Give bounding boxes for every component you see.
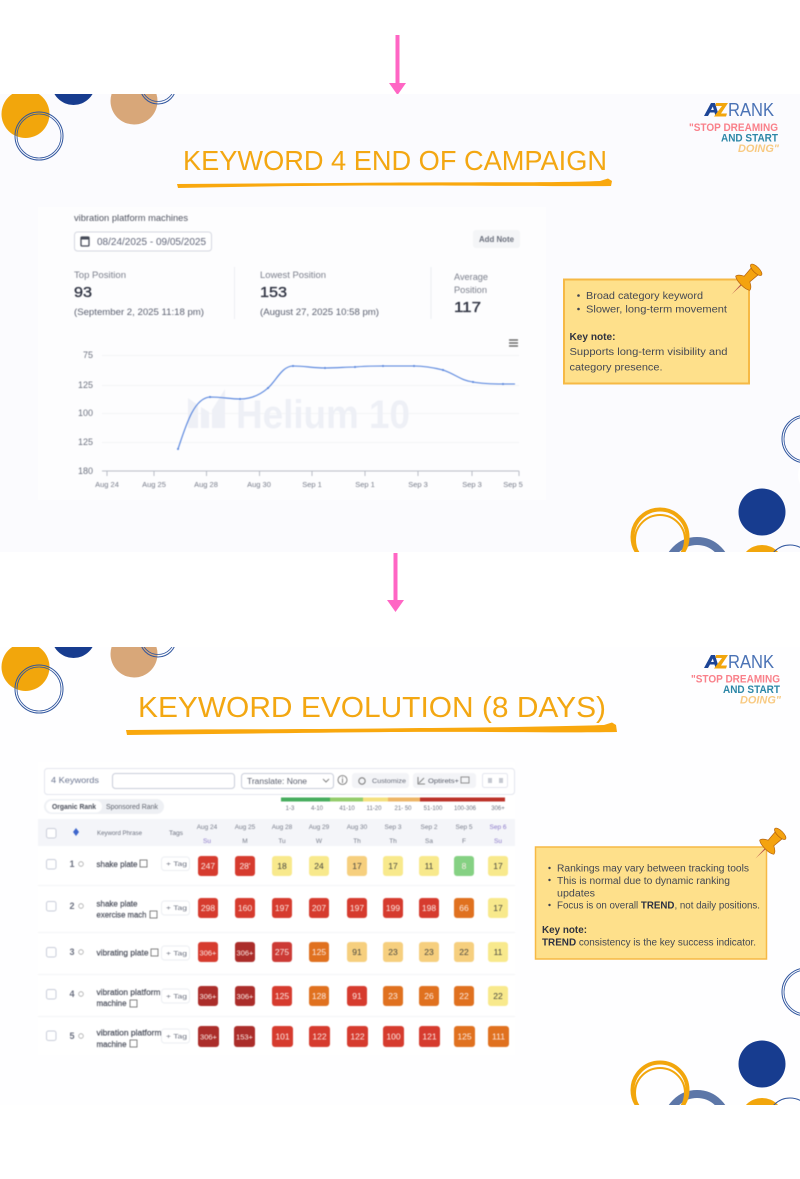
chart: keyword rank line: Aug 30 [247, 480, 271, 489]
table header: W [316, 838, 323, 845]
row: vibration platform machine second: 121 [422, 1032, 437, 1042]
table header: Tags [169, 830, 184, 837]
table header: Sep 6 [490, 824, 507, 831]
callout: broad category note: category presence. [570, 362, 662, 374]
row: vibrating plate: 23 [424, 947, 434, 957]
keyword name: vibration platform machines [74, 213, 188, 224]
logo: AZRANK: DOING" [738, 143, 780, 155]
title: KEYWORD EVOLUTION (8 DAYS) [138, 692, 606, 724]
chart: keyword rank line [78, 340, 523, 489]
tabs: organic and sponsored rank: Organic Rank [52, 804, 96, 811]
row: shake plate exercise mach: 197 [350, 903, 364, 913]
row: shake plate exercise mach: 298 [201, 903, 215, 913]
title underline [177, 178, 612, 188]
row: vibration platform machine second: + Tag [166, 1034, 188, 1040]
logo: AZRANK: AND START [721, 132, 778, 144]
legend: rank colour scale: 41-10 [339, 806, 355, 812]
row: vibration platform machine second: 125 [457, 1032, 472, 1042]
panel: keyword evolution [2, 647, 800, 1105]
row: shake plate: + Tag [166, 861, 188, 868]
table header: Keyword Phrase [97, 830, 142, 837]
row: vibration platform machine second: 122 [312, 1032, 327, 1042]
legend: rank colour scale [281, 798, 505, 812]
stat: top position: Top Position [74, 270, 126, 280]
stat: top position [74, 270, 204, 318]
row: shake plate [46, 856, 508, 876]
row: vibration platform machine: vibration platform [96, 988, 161, 997]
row: vibrating plate: + Tag [166, 950, 188, 958]
decoration: top left shapes [2, 94, 175, 160]
table header: Tu [278, 838, 286, 845]
legend: rank colour scale: 100-306 [454, 806, 477, 812]
row: vibration platform machine second [46, 1026, 509, 1049]
row: vibration platform machine: 26 [424, 991, 434, 1001]
table header: Th [353, 838, 361, 845]
add note button: Add Note [479, 235, 515, 244]
chart: keyword rank line: Aug 25 [142, 480, 166, 489]
logo: AZRANK: DOING" [740, 694, 782, 706]
row: shake plate exercise mach: shake plate [96, 900, 138, 908]
toolbar: Translate: None [247, 777, 308, 786]
legend: rank colour scale: 1-3 [286, 806, 295, 812]
row: shake plate exercise mach [46, 898, 508, 920]
row: vibrating plate: 22 [459, 947, 469, 957]
table header: Aug 24 [197, 824, 218, 831]
row: shake plate exercise mach: + Tag [166, 905, 188, 912]
watermark: Helium 10 [188, 389, 410, 437]
row: shake plate: 11 [425, 861, 434, 871]
row: vibrating plate: 23 [388, 947, 398, 957]
row: vibrating plate [46, 942, 508, 962]
row: shake plate exercise mach: exercise mach [96, 910, 146, 920]
table header: Aug 29 [309, 824, 330, 831]
row: vibration platform machine: 23 [388, 991, 398, 1001]
table header: Th [389, 838, 397, 845]
row: vibrating plate: 91 [352, 947, 362, 957]
icon: push pin [724, 261, 765, 302]
table header: Su [203, 838, 211, 845]
row: shake plate: 28' [239, 861, 251, 871]
title underline [126, 722, 617, 735]
decoration: top left shapes [2, 647, 175, 714]
legend: rank colour scale: 51-100 [424, 806, 443, 812]
row: vibration platform machine: 125 [275, 991, 289, 1001]
toolbar: 4 Keywords [51, 775, 99, 785]
arrow: top pink arrow [389, 35, 406, 95]
table header: Aug 30 [347, 824, 368, 831]
row: vibration platform machine second: 111 [492, 1032, 505, 1042]
callout: trend note: Focus is on overall TREND, not daily positions. [557, 900, 760, 912]
logo: AZRANK: "STOP DREAMING [689, 122, 778, 134]
stat: lowest position [260, 270, 379, 318]
logo: AZRANK [691, 652, 782, 706]
callout: broad category note: Broad category keyword [586, 291, 703, 302]
table header: Aug 28 [272, 824, 293, 831]
callout: trend note: TREND consistency is the key success indicator. [542, 938, 756, 948]
row: shake plate exercise mach: 2 [69, 901, 75, 911]
row: shake plate: 24 [314, 861, 324, 871]
tabs: organic and sponsored rank [44, 799, 164, 814]
row: vibration platform machine: 22 [459, 991, 469, 1001]
row: vibration platform machine second: 5 [69, 1031, 75, 1041]
stat: average position: 117 [454, 299, 481, 316]
row: shake plate: 17 [352, 861, 362, 871]
title: KEYWORD 4 END OF CAMPAIGN [183, 145, 607, 176]
callout: trend note: updates [557, 888, 595, 900]
chart: keyword rank line: Sep 3 [408, 480, 428, 489]
table header [38, 819, 515, 846]
stat: top position: (September 2, 2025 11:18 pm) [74, 307, 204, 318]
tabs: organic and sponsored rank: Sponsored Rank [106, 804, 158, 811]
row: shake plate: 17 [493, 861, 503, 871]
add note button [473, 230, 520, 248]
table header: Sa [425, 838, 433, 845]
row: vibration platform machine: 4 [69, 989, 75, 999]
logo: AZRANK: AND START [723, 684, 780, 696]
logo: AZRANK: RANK [728, 100, 774, 120]
toolbar [44, 768, 514, 794]
row: vibrating plate: 11 [494, 947, 503, 957]
date range picker: 08/24/2025 - 09/05/2025 [97, 237, 206, 248]
table header: Sep 2 [420, 824, 438, 831]
row: vibration platform machine: 306+ [200, 992, 217, 1001]
chart: keyword rank line: Sep 1 [302, 480, 322, 489]
callout: broad category note: Slower, long-term movement [586, 304, 727, 316]
table header: M [242, 838, 248, 845]
row: shake plate: 247 [201, 861, 215, 871]
row: vibration platform machine: 91 [352, 991, 362, 1001]
row: vibration platform machine [46, 986, 508, 1008]
stat: lowest position: 153 [260, 284, 287, 301]
row: vibration platform machine: + Tag [166, 994, 188, 1000]
row: shake plate exercise mach: 198 [422, 903, 436, 913]
icon: chart menu [509, 340, 518, 346]
table header: Aug 25 [235, 824, 256, 831]
callout: trend note: This is normal due to dynamic ranking [557, 876, 730, 887]
row: shake plate exercise mach: 17 [493, 903, 503, 913]
row: vibration platform machine: 22 [493, 991, 503, 1001]
chart: keyword rank line: 180 [78, 466, 93, 476]
arrow: middle pink arrow [387, 553, 404, 612]
legend: rank colour scale: 21- 50 [394, 806, 412, 812]
callout: trend note: Key note: [542, 925, 587, 936]
row: shake plate exercise mach: 66 [459, 903, 469, 913]
stat: average position: Position [454, 285, 487, 295]
callout: trend note [536, 847, 766, 959]
row: vibration platform machine: machine [96, 999, 127, 1008]
panel: keyword 4 end of campaign [2, 94, 800, 552]
chart: keyword rank line: 125 [78, 380, 93, 390]
row: vibrating plate: vibrating plate [96, 948, 149, 958]
callout: trend note: Rankings may vary between tracking tools [557, 864, 749, 874]
table header: Su [494, 838, 502, 845]
row: shake plate: 18 [277, 861, 287, 871]
row: vibrating plate: 125 [312, 947, 326, 957]
callout: broad category note [564, 280, 749, 384]
chart: keyword rank line: Aug 24 [95, 480, 119, 489]
legend: rank colour scale: 4-10 [311, 806, 324, 812]
chart: keyword rank line: 125 [78, 437, 93, 447]
table header: Sep 3 [384, 824, 402, 831]
row: vibration platform machine second: 122 [350, 1032, 365, 1042]
date range picker [74, 232, 212, 251]
row: vibration platform machine: 306+ [237, 992, 254, 1001]
row: vibration platform machine second: 153+ [236, 1032, 254, 1042]
stat: lowest position: Lowest Position [260, 270, 326, 280]
row: vibrating plate: 3 [69, 947, 75, 957]
row: shake plate: 1 [69, 859, 75, 869]
decoration: bottom right shapes [630, 415, 800, 552]
chart: keyword rank line: Sep 3 [462, 480, 482, 489]
row: vibration platform machine second: vibration platform [96, 1028, 162, 1038]
stat: lowest position: (August 27, 2025 10:58 pm) [260, 307, 379, 318]
chart: keyword rank line: 100 [78, 408, 93, 418]
row: shake plate exercise mach: 197 [275, 903, 289, 913]
row: shake plate exercise mach: 160 [238, 903, 252, 913]
panel: keyword table screenshot [38, 762, 515, 1055]
icon: push pin [748, 825, 789, 866]
row: vibration platform machine second: machine [96, 1040, 127, 1049]
logo: AZRANK: RANK [728, 652, 774, 672]
row: vibrating plate: 306+ [237, 948, 254, 958]
row: shake plate exercise mach: 199 [386, 903, 400, 913]
row: vibration platform machine second: 100 [386, 1032, 401, 1042]
logo: AZRANK [689, 100, 780, 155]
legend: rank colour scale: 11-20 [367, 806, 382, 812]
callout: broad category note: Supports long-term visibility and [570, 347, 728, 358]
chart: keyword rank line: Aug 28 [194, 480, 218, 489]
toolbar: Optirets+ [428, 778, 459, 785]
row: shake plate exercise mach: 207 [312, 903, 326, 913]
chart: keyword rank line: 75 [83, 350, 93, 360]
stat: average position: Average [454, 272, 488, 282]
table header: F [462, 838, 466, 845]
legend: rank colour scale: 306+ [491, 806, 505, 812]
decoration: bottom right shapes [630, 968, 800, 1105]
watermark: Helium 10: Helium 10 [236, 393, 410, 437]
row: shake plate: 8 [462, 861, 467, 871]
table header: Sep 5 [456, 824, 473, 831]
row: shake plate: 17 [388, 861, 398, 871]
stat: top position: 93 [74, 284, 92, 301]
row: vibration platform machine second: 101 [275, 1032, 290, 1042]
row: vibrating plate: 275 [275, 947, 289, 957]
row: vibrating plate: 306+ [200, 948, 217, 958]
chart: keyword rank line: Sep 5 [503, 480, 523, 489]
row: vibration platform machine second: 306+ [200, 1032, 218, 1042]
panel: rank tracker screenshot [38, 207, 546, 500]
callout: broad category note: Key note: [570, 332, 616, 343]
toolbar: Customize [372, 778, 406, 785]
logo: AZRANK: "STOP DREAMING [691, 674, 780, 686]
stat: average position [454, 272, 488, 316]
row: vibration platform machine: 128 [312, 991, 326, 1001]
row: shake plate: shake plate [96, 860, 138, 869]
chart: keyword rank line: Sep 1 [355, 480, 375, 489]
